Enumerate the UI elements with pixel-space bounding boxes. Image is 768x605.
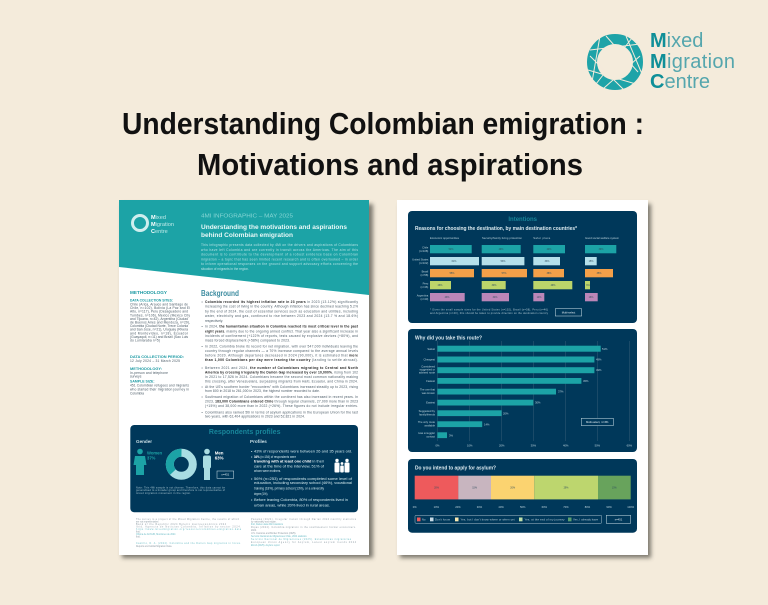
- button: multi-select n=451: Multi-select, n=451: [586, 420, 609, 424]
- icon: family: [334, 459, 350, 472]
- row labels: countries: Brazil: [422, 270, 429, 274]
- column headers: [430, 236, 620, 240]
- row labels: countries: (n=40): [420, 297, 428, 301]
- bar chart: reasons by country: 14%: [537, 296, 542, 299]
- sidebar: methodology: SAMPLE SIZE:: [130, 380, 155, 384]
- panel: asylum intention: [408, 459, 637, 533]
- panel: right document page: [397, 200, 651, 558]
- row labels: countries: Argentina: [417, 294, 429, 298]
- text block: profile bullets: •: [251, 448, 253, 454]
- text block: background bullets: •: [202, 344, 204, 348]
- footnotes: 2024.: [251, 530, 257, 532]
- text block: background bullets: Colombians also ranked 5th in terms of asylum applications in the European Union for the last: [205, 410, 358, 414]
- sidebar: methodology: Tumbes, n=106), Mexico (Mexico City: [130, 313, 190, 317]
- footnotes: Panamá (2024). Irregular transit through Darién 2024 monthly statistics: [251, 518, 357, 521]
- bar chart: reasons by country: 34%: [493, 296, 498, 299]
- row labels: countries: Peru: [423, 282, 429, 286]
- text block: profile bullets: traveling with at least one child in their: [254, 459, 325, 464]
- bar chart: route reasons: Fastest: [426, 379, 435, 383]
- sidebar: methodology: METHODOLOGY: [130, 290, 167, 295]
- footnotes: Bank of the Republic 2024 Boletín macroeconómico 2024: [136, 523, 227, 526]
- footnotes: Rojas (2024). Colombia migration in the southwestern border encounters.: [251, 526, 356, 529]
- footnotes: Castillo, D. A. (2024). Colombia and the Darién Gap migration in focus.: [136, 542, 241, 545]
- sidebar: methodology: (Guayaquil, n=11) and Brazil (Sao Luis: [130, 335, 188, 339]
- bar chart: reasons by country: 49%: [551, 284, 556, 287]
- bar chart: reasons by country: 30%: [492, 284, 497, 287]
- sidebar: methodology: In-person and telephone: [130, 371, 168, 375]
- bar chart: reasons by country: [430, 245, 616, 301]
- bar chart: route reasons: Has smuggler: [418, 431, 435, 435]
- sidebar: methodology: Chile (Arica, Arauco and Santiago de: [130, 302, 188, 306]
- footnotes: Oficina de ACNUR, Monitoreo de 2024: [136, 533, 176, 536]
- header banner: This infographic presents data collected by 4Mi on the drivers and aspirations of Colombians: [201, 243, 358, 247]
- text block: background bullets: •: [202, 324, 204, 328]
- sidebar: methodology: who started their migration journey in: [130, 388, 189, 392]
- text block: background bullets: In 2022, Colombia broke its record for net migration, with over 547,000 individuals leaving the: [205, 344, 358, 348]
- text block: profile bullets: 34% (n=154) of respondents were: [254, 454, 296, 459]
- sidebar: methodology: de Buenos Aires and Mendoza, n=29),: [130, 320, 190, 324]
- row labels: countries: [412, 246, 429, 301]
- heading: profiles: Profiles: [250, 439, 267, 444]
- bar chart: route reasons: advised route: [419, 370, 436, 374]
- text block: background bullets: incidents of confinement (+122% of reports, tests caused by explosive devices (+80%), and: [205, 334, 358, 338]
- stacked bar chart: 20%: [455, 505, 461, 509]
- sidebar: methodology: METHODOLOGY:: [130, 367, 162, 371]
- label: men: 63%: [215, 456, 224, 461]
- header banner: [119, 200, 369, 295]
- sidebar: methodology: 12 July 2024 – 31 March 2025: [130, 359, 180, 363]
- bar chart: route reasons: [418, 341, 633, 448]
- label: men: Men: [215, 450, 223, 455]
- text block: background bullets: in 2021 to 17,526 in 2024. Colombians became the second most common nationality making: [205, 375, 358, 379]
- heading: intentions: Intentions: [508, 217, 538, 223]
- bar chart: route reasons: 3%: [449, 433, 453, 437]
- bar chart: route reasons: 51%: [602, 347, 608, 351]
- heading: gender: Gender: [136, 439, 152, 444]
- stacked bar chart: 30%: [477, 505, 483, 509]
- bar chart: route reasons: suggested or: [419, 368, 435, 372]
- logo: Mixed Migration Centre: Mixed: [650, 30, 703, 52]
- bar chart: reasons by country: 57%: [502, 272, 507, 275]
- sidebar: methodology: Alto, n=117), Peru (Desaguadero and: [130, 310, 188, 314]
- bar chart: route reasons: was known: [422, 391, 436, 395]
- text block: background bullets: (+15%) and 38,000 more than in 2022 (+26%). These figures do not include irregular entries.: [205, 404, 358, 408]
- button: n=451: n=451: [615, 517, 623, 521]
- footnotes: EUAA (2025). Asylum report: [251, 544, 280, 547]
- logo: Mixed Migration Centre: Migration: [650, 51, 735, 73]
- chart title: Reasons for choosing the destination, by main destination countries*: [415, 226, 577, 232]
- text block: background bullets: increasing the cost of living in the country. Although inflation has since declined reaching 5.2%: [205, 305, 358, 309]
- sidebar: methodology: DATA COLLECTION SITES:: [130, 298, 173, 302]
- text block: background bullets: [202, 300, 359, 419]
- text block: background bullets: •: [202, 366, 204, 370]
- bar chart: reasons by country: 61%: [452, 260, 457, 263]
- logo: Mixed Migration Centre: Centre: [650, 71, 710, 93]
- stacked bar chart: 60%: [542, 505, 548, 509]
- stacked bar chart: 10%: [434, 505, 440, 509]
- row labels: countries: (n=58): [420, 273, 428, 277]
- note: [430, 308, 549, 315]
- stacked bar chart: [413, 476, 635, 509]
- footnotes: are not representative.: [136, 520, 159, 524]
- text block: profile bullets: •: [251, 476, 253, 481]
- bar chart: route reasons: 50%: [595, 444, 601, 448]
- header banner: who have left Colombia and are currently in transit across the Americas. The aim of this: [201, 248, 358, 252]
- stacked bar chart: 90%: [606, 505, 612, 509]
- text block: profile bullets: training (18%), primary school (13%), or a university: [254, 485, 324, 490]
- text block: profile bullets: care at the time of the interview, 51% of: [254, 463, 325, 468]
- text block: background bullets: •: [202, 385, 204, 389]
- stacked bar chart: 100%: [627, 505, 635, 509]
- bar chart: reasons by country: 35%: [597, 272, 602, 275]
- footnotes: European Union Agency for Asylum, Latest asylum trends 2024: [251, 541, 357, 544]
- text block: background bullets: •: [202, 395, 204, 399]
- bar chart: route reasons: family/friends: [419, 412, 436, 416]
- bar chart: reasons by country: 40%: [547, 248, 552, 251]
- stacked bar chart: 40%: [498, 505, 504, 509]
- footnotes: Servicio Nacional de Migraciones Chile, 2024 statistics: [251, 535, 308, 538]
- panel: intentions: [408, 211, 637, 323]
- footnotes: U.S. Customs and Border Protection (2025).: [251, 532, 296, 535]
- text block: background bullets: water, electricity and gas, continued to rise between 2023 and 2024 (13.7 % and 18.6%): [205, 314, 358, 318]
- header banner: Understanding the motivations and aspirations: [201, 224, 348, 231]
- bar chart: route reasons: 60%: [627, 444, 633, 448]
- bar chart: reasons by country: 53%: [501, 260, 506, 263]
- legend: [415, 515, 602, 523]
- stacked bar chart: 20%: [510, 486, 516, 490]
- text block: background bullets: by the end of 2024, the cost of essential services such as education and utilities, including: [205, 309, 358, 313]
- bar chart: route reasons: 30%: [535, 400, 541, 404]
- row labels: countries: (n=102): [419, 261, 428, 265]
- bar chart: reasons by country: 15%: [589, 260, 594, 263]
- button: multi-select: Multi-select: [562, 310, 576, 314]
- text block: background bullets: In 2024, the humanitarian situation in Colombia reached its most critical level in the past: [205, 324, 359, 328]
- text block: background bullets: Colombia recorded its highest inflation rate in 23 years in 2023 (13.12%) significantly: [205, 300, 358, 304]
- note: [136, 486, 226, 495]
- footnotes: Servicio Nacional de Migraciones (2025). Estadísticas migratorias: [251, 538, 352, 541]
- bar chart: route reasons: 0%: [435, 444, 440, 448]
- bar chart: route reasons: Cheapest: [423, 358, 435, 362]
- bar chart: route reasons: 20%: [503, 411, 509, 415]
- header banner: behind Colombian emigration: [201, 232, 293, 239]
- sidebar: methodology: 451 Colombian refugees and migrants: [130, 384, 189, 388]
- footnotes: Ibid, Agencia de Noticias Colombia, Inflation by sector 2024.: [136, 526, 241, 528]
- text block: background bullets: •: [202, 410, 204, 414]
- text block: background bullets: Southward migration of Colombians within the continent has also increased in recent years. In: [205, 395, 358, 399]
- panel: left document page: [119, 200, 373, 558]
- footnotes: The survey is a project of the Mixed Migration Centre, the results of which: [136, 518, 240, 521]
- bar chart: reasons by country: 38%: [547, 272, 552, 275]
- bar chart: reasons by country: 39%: [599, 248, 604, 251]
- stacked bar chart: 15%: [612, 486, 618, 490]
- footnotes: https://www.mixedmigration.org/resource/colombian-emigration-data: [136, 528, 242, 531]
- bar chart: reasons by country: 33%: [545, 260, 550, 263]
- header banner: document is to contribute to the development of a robust evidence base on Colombian: [201, 253, 358, 257]
- bar chart: route reasons: 14%: [484, 422, 490, 426]
- footnotes: Ibid, Darién data 2024 statistics: [251, 523, 284, 526]
- stacked bar chart: 15%: [472, 486, 478, 490]
- stacked bar chart: 20%: [434, 486, 440, 490]
- sidebar: methodology: Colombia: [130, 391, 144, 395]
- text block: profile bullets: whom were mothers.: [254, 468, 281, 473]
- title: Motivations and aspirations: [197, 147, 583, 182]
- sidebar: methodology: and Montevideo, n=18), Ecuador: [130, 331, 189, 335]
- header banner: to inform operational responses on the ground and support advocacy efforts concerning the: [201, 262, 358, 266]
- panel: respondents profiles: [130, 425, 358, 512]
- text block: background bullets: this crossing, after Venezuelans, surpassing migrants from Haiti, Ecuador, and China in 2024.: [205, 379, 358, 383]
- row labels: countries: United States: [412, 258, 429, 262]
- legend: Yes, but I don't know where or when yet: [460, 518, 515, 522]
- bar chart: route reasons: Safest: [427, 347, 435, 351]
- title: Understanding Colombian emigration :: [122, 106, 644, 141]
- title: [122, 106, 644, 182]
- text block: background bullets: than 1,000 Colombians per day were leaving the country (landing to settle abroad).: [205, 358, 358, 362]
- bar chart: reasons by country: 26%: [438, 284, 443, 287]
- column headers: Safer place: [533, 236, 551, 240]
- stacked bar chart: 80%: [585, 505, 591, 509]
- bar chart: route reasons: available: [424, 423, 436, 427]
- legend: Yes, at the end of my journey: [524, 518, 565, 522]
- bar chart: reasons by country: 43%: [445, 296, 450, 299]
- bar chart: reasons by country: 52%: [449, 248, 454, 251]
- row labels: countries: (n=108): [419, 249, 428, 253]
- legend: No: [422, 518, 426, 522]
- footnotes: [136, 518, 357, 548]
- sidebar: methodology: DATA COLLECTION PERIOD:: [130, 355, 184, 359]
- bar chart: route reasons: contact: [426, 434, 435, 438]
- bar chart: route reasons: Suggested by: [419, 409, 436, 413]
- header banner: Migration: [151, 222, 174, 228]
- label: women: Women: [147, 450, 162, 455]
- text block: background bullets: •: [202, 300, 204, 304]
- bar chart: reasons by country: 16%: [589, 296, 594, 299]
- button: multi-select n=451: [581, 418, 613, 426]
- bar chart: route reasons: 49%: [596, 368, 602, 372]
- text block: profile bullets: degree (11%).: [254, 491, 268, 496]
- note: and Argentina (n=40), this should be taken to provide direction on the destination country: [430, 312, 549, 315]
- bar chart: route reasons: 20%: [499, 444, 505, 448]
- chart title: Why did you take this route?: [415, 336, 482, 342]
- row labels: countries: Chile: [422, 246, 429, 250]
- sidebar: methodology: surveys: [130, 374, 142, 378]
- note: * Given the small sample sizes for the United States (n=102), Brazil (n=58), Peru (n=46): [430, 308, 548, 312]
- footnotes: by nationality and region.: [251, 520, 277, 524]
- bar chart: reasons by country: 49%: [499, 248, 504, 251]
- stacked bar chart: 29%: [564, 486, 569, 490]
- sidebar: methodology: and San Jose, n=21), Uruguay (Rivera: [130, 328, 188, 332]
- text block: background bullets: respectively.: [205, 319, 223, 323]
- bar chart: reasons by country: 55%: [450, 272, 455, 275]
- text block: profile bullets: •: [251, 454, 253, 459]
- text block: profile bullets: •: [251, 497, 253, 502]
- text block: background bullets: 2023, 183,000 Colombians entered Chile through regular channels, 27,000 more than in 2023: [205, 399, 358, 403]
- sidebar: methodology: do Lumiaraba n=5): [130, 338, 160, 342]
- text block: background bullets: from 800 in 2018 to 261,000 in 2023, the highest number recorded to date.: [205, 389, 320, 393]
- column headers: Good social welfare system: [585, 236, 620, 240]
- sidebar: methodology: Colombia (Ciudad Norte, Trece Colonia: [130, 324, 188, 328]
- text block: background bullets: At the US's southern border "encounters" with Colombians increased steadily up to 2023, rising: [205, 385, 358, 389]
- header banner: migration – a topic that has seen limited recent research and is often overlooked – in order: [201, 257, 359, 261]
- text block: background bullets: eight years, mainly due to the ongoing armed conflict. That year also a significant increase in: [205, 329, 358, 333]
- legend: Don't know: [435, 518, 450, 522]
- text block: background bullets: country through regular channels — a 70% increase compared to the average annual levels: [205, 349, 358, 353]
- sidebar: methodology: [130, 290, 190, 395]
- text block: background bullets: before 2020. Although departures decreased in 2024 (90,000), it is estimated that more: [205, 354, 358, 358]
- stacked bar chart: 50%: [520, 505, 526, 509]
- chart title: Do you intend to apply for asylum?: [415, 466, 496, 472]
- panel: why did you take this route: [408, 329, 637, 452]
- row labels: countries: (n=46): [420, 285, 428, 289]
- header banner: Mixed: [151, 215, 166, 221]
- heading: respondents profiles: Respondents profiles: [209, 429, 281, 436]
- bar chart: reasons by country: 6%: [586, 284, 591, 287]
- header banner: Centre: [151, 229, 168, 235]
- column headers: Economic opportunities: [430, 236, 460, 240]
- note: Note: This 4Mi sample is not diverse. Therefore, this data cannot be: [136, 486, 226, 489]
- text block: profile bullets: [251, 448, 353, 507]
- icon: man: [203, 449, 211, 480]
- legend: Yes, I already have: [573, 518, 598, 522]
- donut chart: gender split: [165, 448, 198, 481]
- text block: background bullets: Between 2021 and 2024, the number of Colombians migrating to Central and North: [205, 366, 358, 370]
- icon: woman: [134, 449, 146, 475]
- bar chart: route reasons: Easiest: [426, 400, 435, 404]
- label: women: 37%: [147, 455, 156, 460]
- logo: Mixed Migration Centre: [588, 30, 735, 93]
- button: sample size: [217, 471, 234, 478]
- header banner: 4MI INFOGRAPHIC – MAY 2025: [201, 214, 293, 220]
- bar chart: route reasons: 10%: [467, 444, 473, 448]
- footnotes: Reports and Global Migration Data.: [136, 545, 172, 548]
- footnotes: Ibid.: [136, 536, 141, 538]
- button: sample size: n=451: [221, 473, 230, 477]
- column headers: Security/family living protection: [482, 236, 522, 240]
- text block: profile bullets: Before leaving Colombia, 80% of respondents lived in: [254, 497, 348, 502]
- button: multi-select: [555, 309, 582, 316]
- bar chart: route reasons: 40%: [563, 444, 569, 448]
- bar chart: route reasons: Considered: [421, 364, 435, 368]
- text block: background bullets: America by crossing irregularly the Darién Gap increased by over 10,000%, rising from 102: [205, 370, 358, 374]
- text block: background bullets: two years, with 62,404 applications in 2023 and 52,821 in 2024.: [205, 415, 305, 419]
- header banner: situation of migrants in the region.: [201, 267, 249, 271]
- bar chart: route reasons: 30%: [531, 444, 537, 448]
- stacked bar chart: 70%: [563, 505, 569, 509]
- note: generalised to a broader group and therefore is not representative of: [136, 489, 225, 492]
- button: n=451: [606, 515, 631, 523]
- note: mixed migration movement in the region.: [136, 492, 191, 495]
- text block: background bullets: mass forced displacement (+58%) compared to 2023.: [205, 339, 290, 343]
- bar chart: route reasons: 49%: [596, 358, 602, 362]
- text block: profile bullets: education, including secondary school (46%), vocational: [254, 480, 352, 485]
- text block: profile bullets: 43% of respondents were between 26 and 35 years old.: [254, 448, 352, 454]
- bar chart: route reasons: The only route: [418, 420, 435, 424]
- bar chart: route reasons: 45%: [583, 379, 589, 383]
- footnotes: Ibid.: [136, 532, 141, 534]
- sidebar: methodology: Chile, n=102), Bolivia (La Paz and El: [130, 306, 190, 310]
- bar chart: route reasons: 37%: [558, 390, 564, 394]
- heading: Background: Background: [201, 288, 239, 298]
- stacked bar chart: 0%: [413, 505, 417, 509]
- text block: profile bullets: 56% (n=253) of respondents completed some level of: [254, 476, 353, 481]
- bar chart: route reasons: The one that: [420, 388, 435, 392]
- sidebar: methodology: and Tijuana, n=42), Argentina (Ciudad: [130, 317, 188, 321]
- text block: profile bullets: urban areas, while 20% lived in rural areas.: [254, 502, 330, 507]
